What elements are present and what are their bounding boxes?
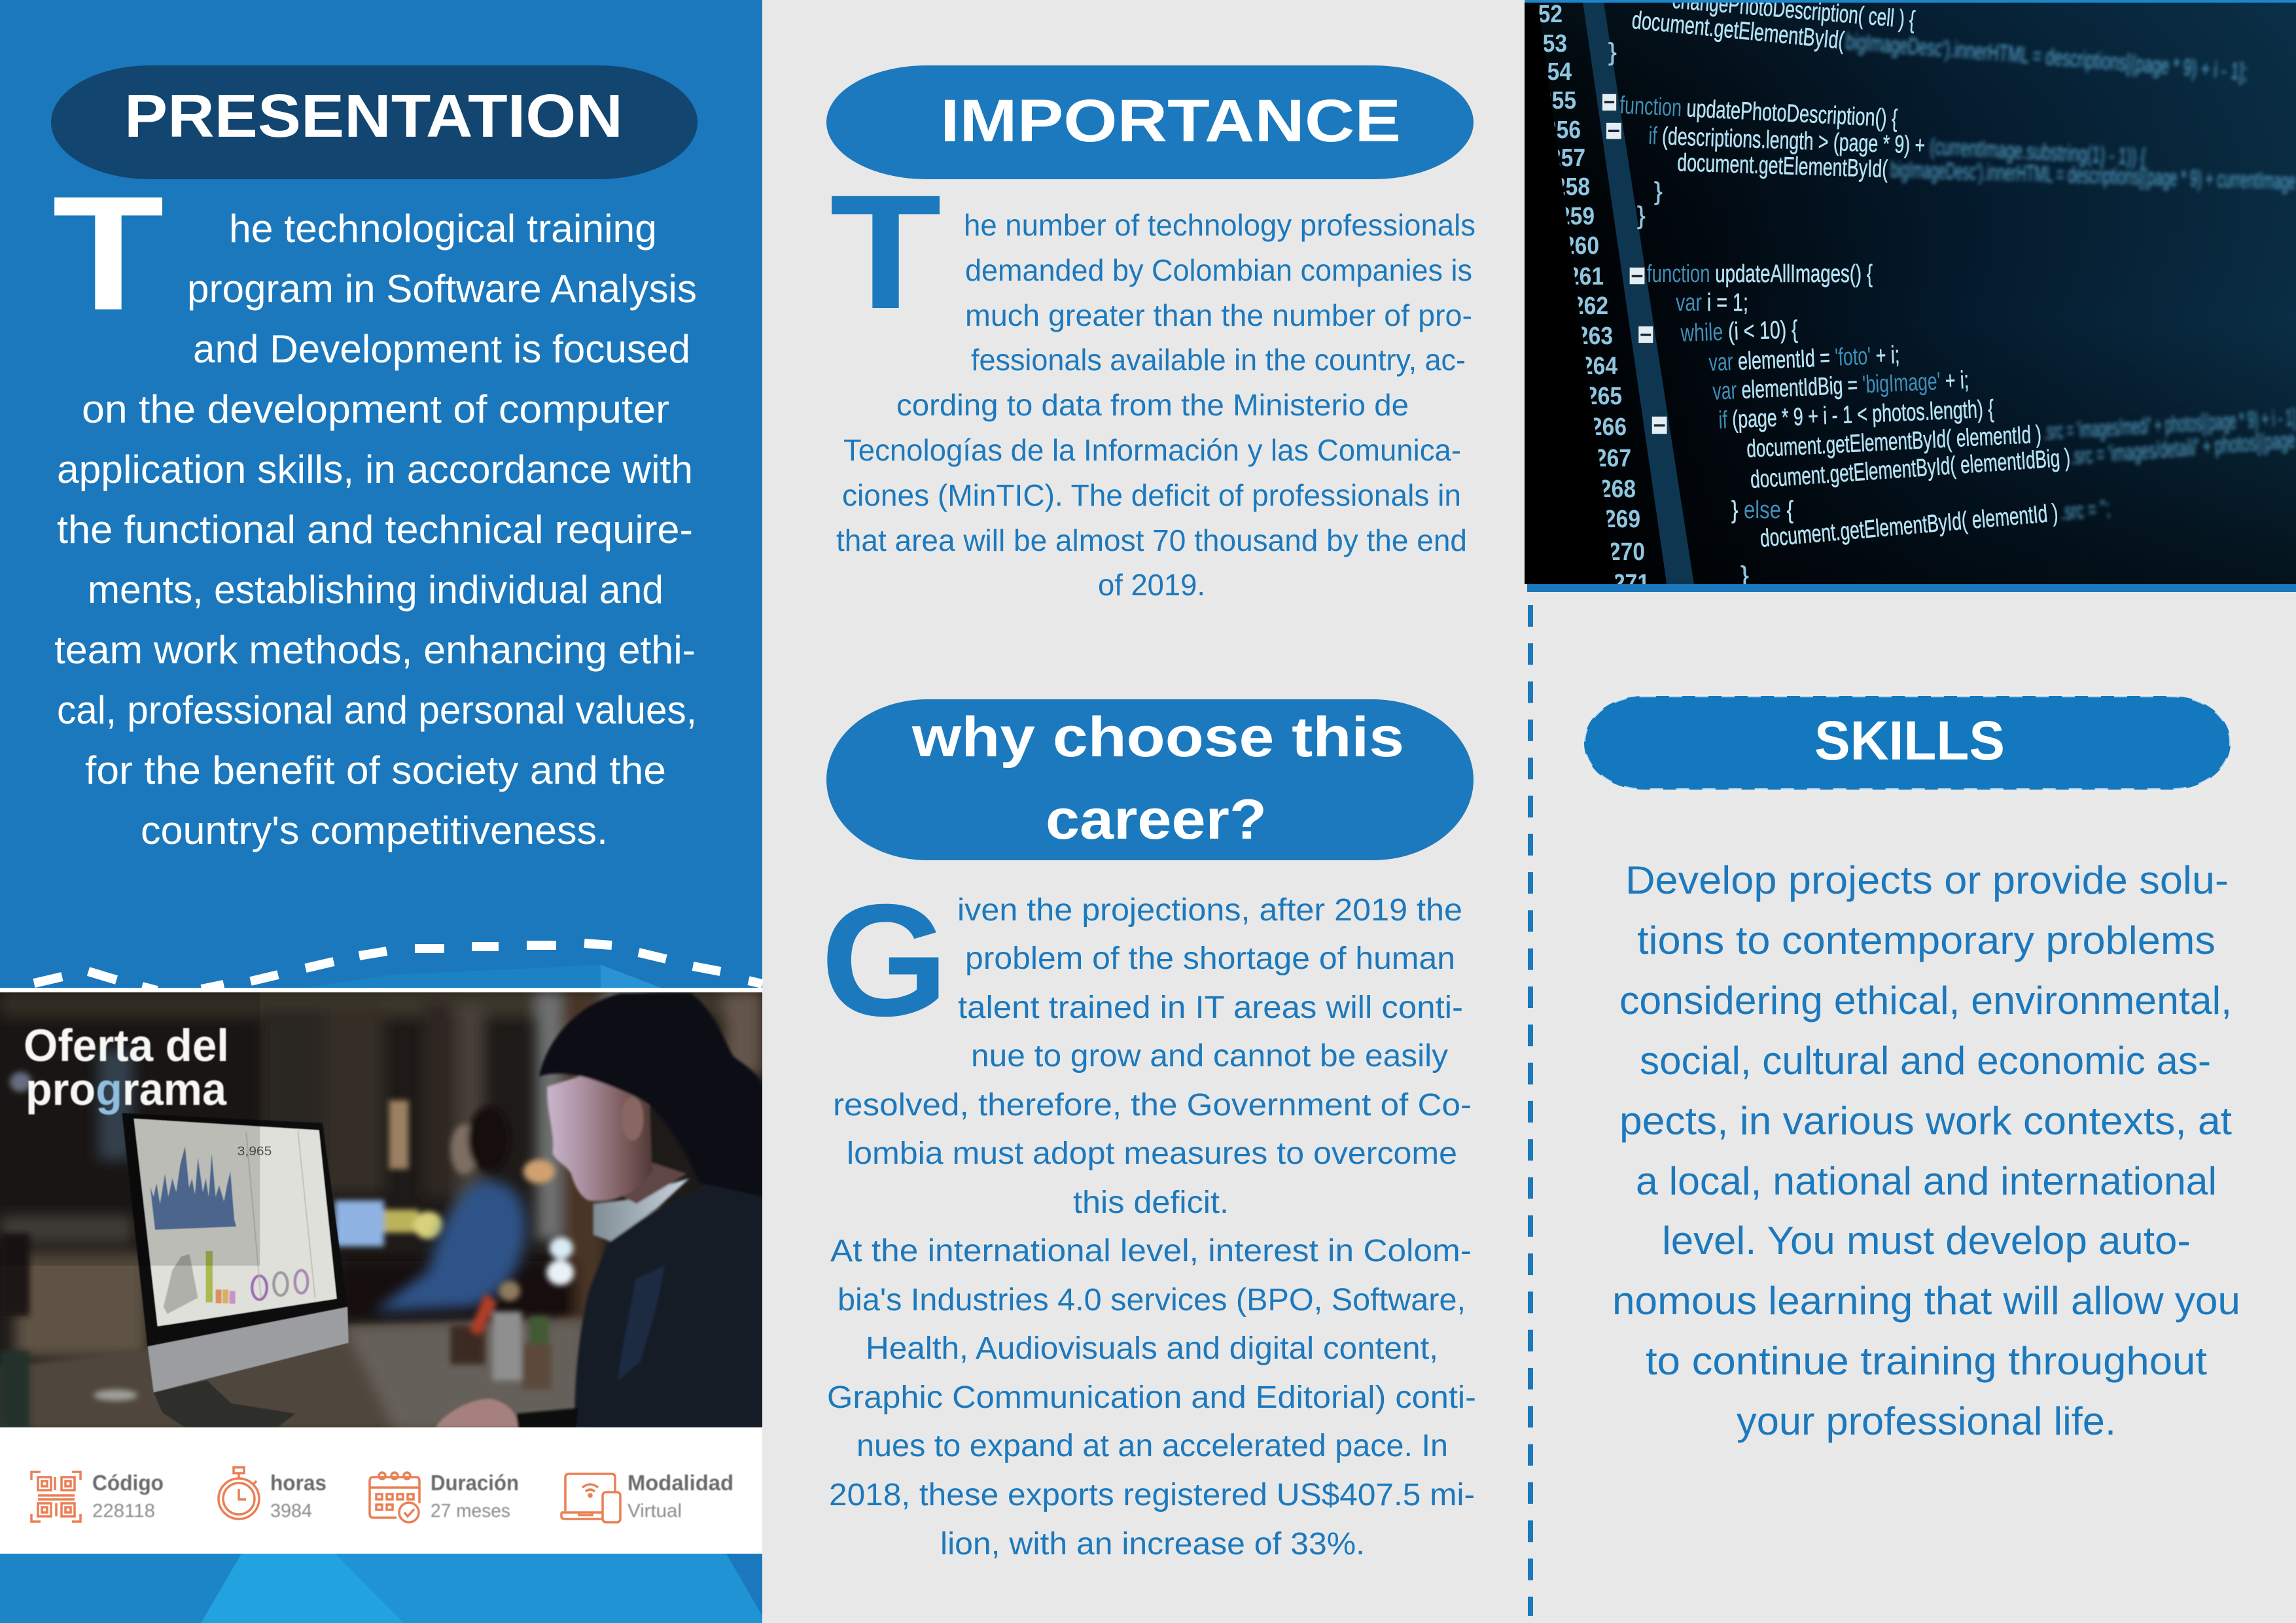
label: duracion: Duración [431,1471,519,1495]
text block: importance: he number of technology professionals [964,208,1475,242]
text block: presentation: the functional and technical require- [57,508,693,551]
code lines in focus: } [1740,562,1749,589]
label: modalidad [627,1471,733,1522]
text block: skills: tions to contemporary problems [1637,918,2216,962]
line numbers: 265 [1585,383,1622,410]
text block: presentation: on the development of computer [82,387,669,431]
screen number: 3,965 [238,1145,272,1159]
photo: woman at computer: programa [26,1064,227,1115]
dashed vertical divider [1528,605,1533,1616]
code lines in focus: } [1637,202,1646,230]
line numbers: 269 [1604,506,1640,533]
footer facets [0,1554,762,1623]
label: modalidad: Virtual [627,1501,682,1522]
line numbers: 252 [1526,1,1563,28]
code lines in focus [1608,0,2071,589]
code lines in focus: function updatePhotoDescription() { [1619,92,1898,133]
text block: why choose: resolved, therefore, the Government of Co- [833,1088,1472,1123]
text block: importance: much greater than the number of pro- [965,298,1472,332]
code lines in focus: var i = 1; [1676,289,1748,317]
line numbers: 256 [1544,116,1581,144]
text block: importance: ciones (MinTIC). The deficit of professionals in [842,478,1461,512]
heading: importance [826,65,1474,179]
text block: importance: demanded by Colombian companies is [965,253,1472,287]
text block: skills [1612,858,2240,1443]
text block: importance: Tecnologías de la Información y las Comunica- [843,433,1461,467]
line numbers [1539,5,1646,584]
label: codigo [92,1471,164,1522]
photo: source code screen [1525,0,2296,597]
text block: why choose: problem of the shortage of human [965,941,1455,976]
line numbers: 268 [1599,476,1636,503]
black mask over first digits [1525,0,1616,584]
line numbers: 270 [1608,538,1645,566]
code lines in focus: if (descriptions.length > (page * 9) + [1648,122,1926,160]
text block: importance [836,208,1475,602]
white info strip [0,1427,762,1554]
heading: presentation: PRESENTATION [124,82,623,150]
line numbers: 263 [1576,323,1613,350]
blurred code lines [1845,27,2296,525]
text block: skills: level. You must develop auto- [1662,1219,2191,1263]
icon: QR code [31,1472,80,1522]
text block: skills: Develop projects or provide solu- [1625,858,2229,902]
icon: stopwatch [219,1467,259,1519]
code lines in focus: if (page * 9 + i - 1 < photos.length) { [1718,395,1994,434]
drop cap T: T [830,161,942,343]
photo: woman at computer [0,990,763,1431]
text block: presentation: he technological training [229,207,657,251]
heading: skills: SKILLS [1814,710,2005,771]
line numbers: 267 [1595,445,1631,472]
code lines in focus: document.getElementById( elementId ) [1759,499,2059,553]
code lines in focus: var elementIdBig = 'bigImage' + i; [1712,366,1969,406]
text block: why choose: this deficit. [1073,1185,1229,1220]
line numbers: 255 [1540,87,1576,114]
code lines in focus: } [1654,178,1663,205]
heading: presentation [51,65,698,179]
text block: presentation: and Development is focused [193,327,690,371]
blurred code lines: (currentImage.substring(1) - 1)) { [1930,133,2146,170]
label: codigo: Código [92,1471,164,1495]
gutter strip and fold markers [1583,0,1694,585]
label: codigo: 228118 [92,1501,155,1522]
icon: calendar [370,1473,419,1522]
panel: importance [826,65,1475,602]
drop cap T: T [52,162,164,344]
drop cap G: G [821,871,949,1049]
label: horas: horas [270,1471,327,1495]
text block: skills: to continue training throughout [1646,1339,2207,1383]
code lines in focus: } [1608,39,1617,66]
text block: presentation: for the benefit of society and the [85,748,666,792]
text block: presentation: application skills, in accordance with [57,447,693,491]
text block: presentation: ments, establishing individual and [88,568,663,612]
heading: importance: IMPORTANCE [940,88,1401,154]
line numbers: 261 [1567,263,1604,290]
code lines in focus: document.getElementById( elementId ) [1746,421,2042,463]
text block: why choose: talent trained in IT areas will conti- [958,990,1463,1025]
line numbers: 260 [1563,232,1599,260]
icon: laptop and phone [561,1474,620,1522]
code lines in focus: var elementId = 'foto' + i; [1708,341,1900,377]
text block: skills: your professional life. [1737,1399,2116,1443]
label: duracion [431,1471,519,1522]
white rule above photo [0,988,762,993]
text block: skills: pects, in various work contexts, at [1619,1099,2232,1143]
text block: presentation [54,207,697,852]
heading: skills [1578,692,2236,793]
text block: why choose: bia's Industries 4.0 services (BPO, Software, [838,1283,1466,1318]
text block: skills: considering ethical, environmental, [1619,979,2232,1022]
text block: why choose: nue to grow and cannot be easily [971,1039,1448,1073]
line numbers: 271 [1613,570,1650,597]
line numbers: 262 [1572,292,1608,320]
dashed white arc [34,943,762,990]
text block: importance: cording to data from the Ministerio de [896,388,1409,422]
line numbers: 254 [1535,58,1572,86]
top accent line [1525,0,2296,3]
line numbers: 266 [1590,413,1627,441]
bottom accent line [1527,584,2296,592]
text block: skills: nomous learning that will allow you [1612,1279,2240,1323]
panel: presentation [0,0,762,990]
panel: skills [1578,692,2240,1443]
heading: why choose this career: career? [1046,788,1267,851]
label: horas: 3984 [270,1501,312,1522]
heading: why choose this career: why choose this [911,706,1404,769]
label: modalidad: Modalidad [627,1471,733,1495]
code lines in focus: function updateAllImages() { [1647,260,1873,288]
line numbers: 257 [1549,145,1585,172]
text block: presentation: team work methods, enhancing ethi- [54,628,696,672]
text block: importance: of 2019. [1098,568,1205,602]
text block: presentation: cal, professional and personal values, [57,688,697,732]
text block: presentation: program in Software Analysis [187,267,697,311]
text block: why choose: lion, with an increase of 33%. [940,1527,1365,1562]
panel: why choose this career [821,699,1476,1562]
text block: skills: a local, national and international [1636,1159,2217,1203]
text block: importance: fessionals available in the country, ac- [971,343,1466,377]
code lines in focus: } else { [1731,497,1793,524]
text block: skills: social, cultural and economic as- [1640,1039,2211,1083]
line numbers: 253 [1530,30,1567,58]
photo: woman at computer: Oferta del [24,1020,229,1071]
text block: why choose: Graphic Communication and Editorial) conti- [827,1380,1476,1415]
text block: why choose: 2018, these exports registered US$407.5 mi- [829,1478,1475,1512]
line numbers: 259 [1558,203,1595,230]
heading: why choose this career [826,699,1474,860]
person [436,992,763,1429]
blurred code lines: .src = ''; [2059,495,2111,525]
text block: why choose: At the international level, interest in Colom- [830,1234,1472,1268]
text block: why choose: Health, Audiovisuals and digital content, [866,1331,1438,1366]
text block: presentation: country's competitiveness. [141,809,608,852]
label: duracion: 27 meses [431,1501,510,1522]
text block: importance: that area will be almost 70 thousand by the end [836,523,1467,557]
text block: why choose: lombia must adopt measures to overcome [847,1136,1457,1171]
label: horas [270,1471,327,1522]
code lines in focus: document.getElementById( [1677,149,1888,183]
code lines in focus: document.getElementById( elementIdBig ) [1750,444,2071,494]
text block: why choose [827,893,1476,1562]
text block: why choose: iven the projections, after 2019 the [957,893,1462,928]
code lines in focus: while (i < 10) { [1680,316,1798,347]
line numbers: 264 [1581,353,1617,380]
text block: why choose: nues to expand at an accelerated pace. In [857,1429,1448,1463]
line numbers: 258 [1553,173,1590,201]
dark overlay behind title [0,992,260,1266]
code lines in focus: document.getElementById( [1631,7,1846,55]
